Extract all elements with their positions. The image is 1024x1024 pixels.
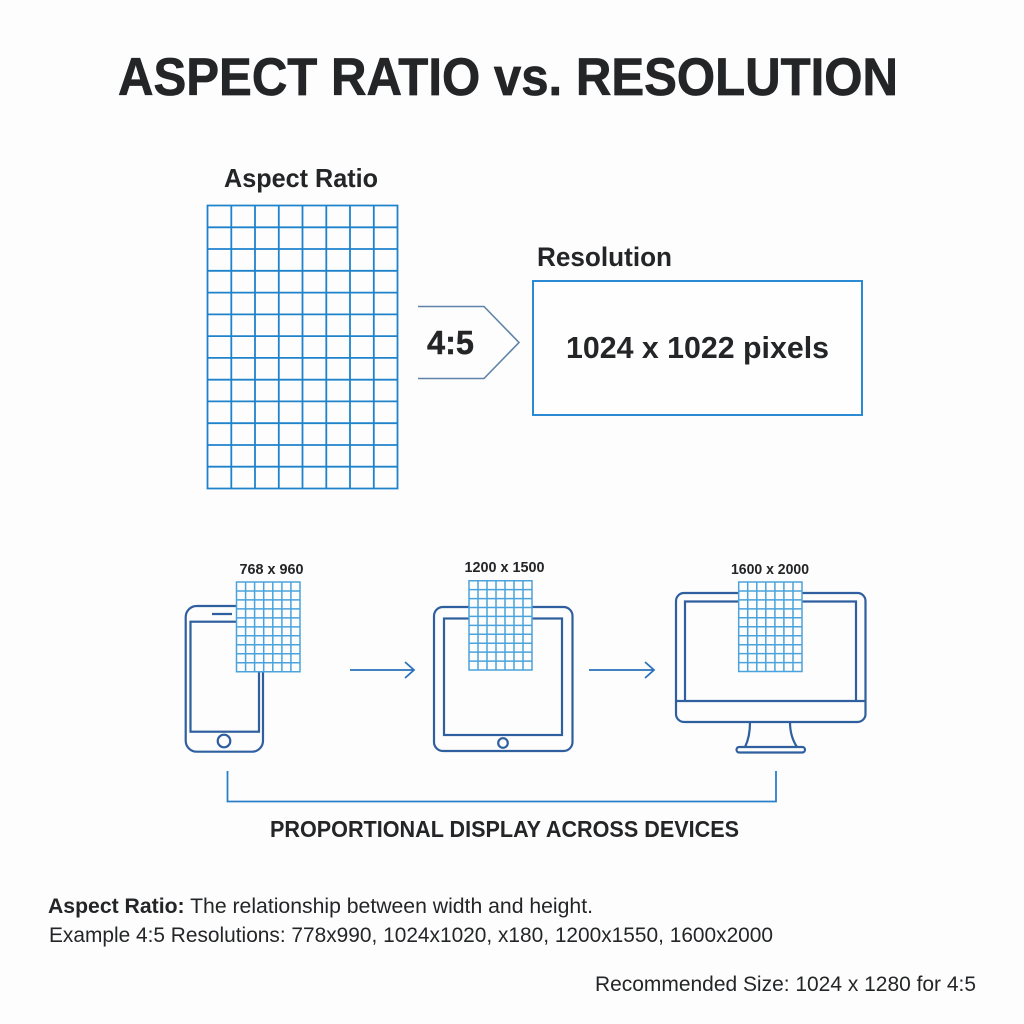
resolution box: 1024 x 1022 pixels bbox=[566, 330, 829, 365]
ratio arrow with 4:5 label bbox=[418, 306, 519, 378]
heading: resolution: Resolution bbox=[537, 242, 672, 272]
bracket caption: PROPORTIONAL DISPLAY ACROSS DEVICES bbox=[270, 816, 739, 842]
phone label: 768 x 960 bbox=[240, 562, 304, 578]
tablet grid bbox=[469, 581, 532, 670]
tablet label: 1200 x 1500 bbox=[464, 560, 544, 576]
heading: aspect ratio: Aspect Ratio bbox=[224, 163, 378, 193]
phone grid bbox=[236, 582, 300, 672]
bracket bbox=[228, 771, 776, 802]
definition text bbox=[48, 894, 773, 947]
title: ASPECT RATIO vs. RESOLUTION bbox=[118, 48, 898, 107]
aspect ratio grid bbox=[208, 206, 398, 488]
device: desktop monitor bbox=[676, 562, 866, 752]
arrow: phone to tablet bbox=[350, 662, 414, 678]
device: tablet bbox=[434, 560, 572, 751]
desktop grid bbox=[739, 582, 802, 672]
desktop label: 1600 x 2000 bbox=[731, 562, 809, 578]
example resolutions: Example 4:5 Resolutions: 778x990, 1024x1020, x180, 1200x1550, 1600x2000 bbox=[49, 923, 773, 947]
arrow: tablet to desktop bbox=[589, 662, 654, 678]
resolution box bbox=[533, 281, 862, 415]
definition text: Aspect Ratio: The relationship between width and height. bbox=[48, 894, 593, 918]
ratio arrow with 4:5 label: 4:5 bbox=[427, 324, 474, 361]
recommended size note: Recommended Size: 1024 x 1280 for 4:5 bbox=[595, 972, 976, 996]
device: phone bbox=[186, 562, 304, 752]
